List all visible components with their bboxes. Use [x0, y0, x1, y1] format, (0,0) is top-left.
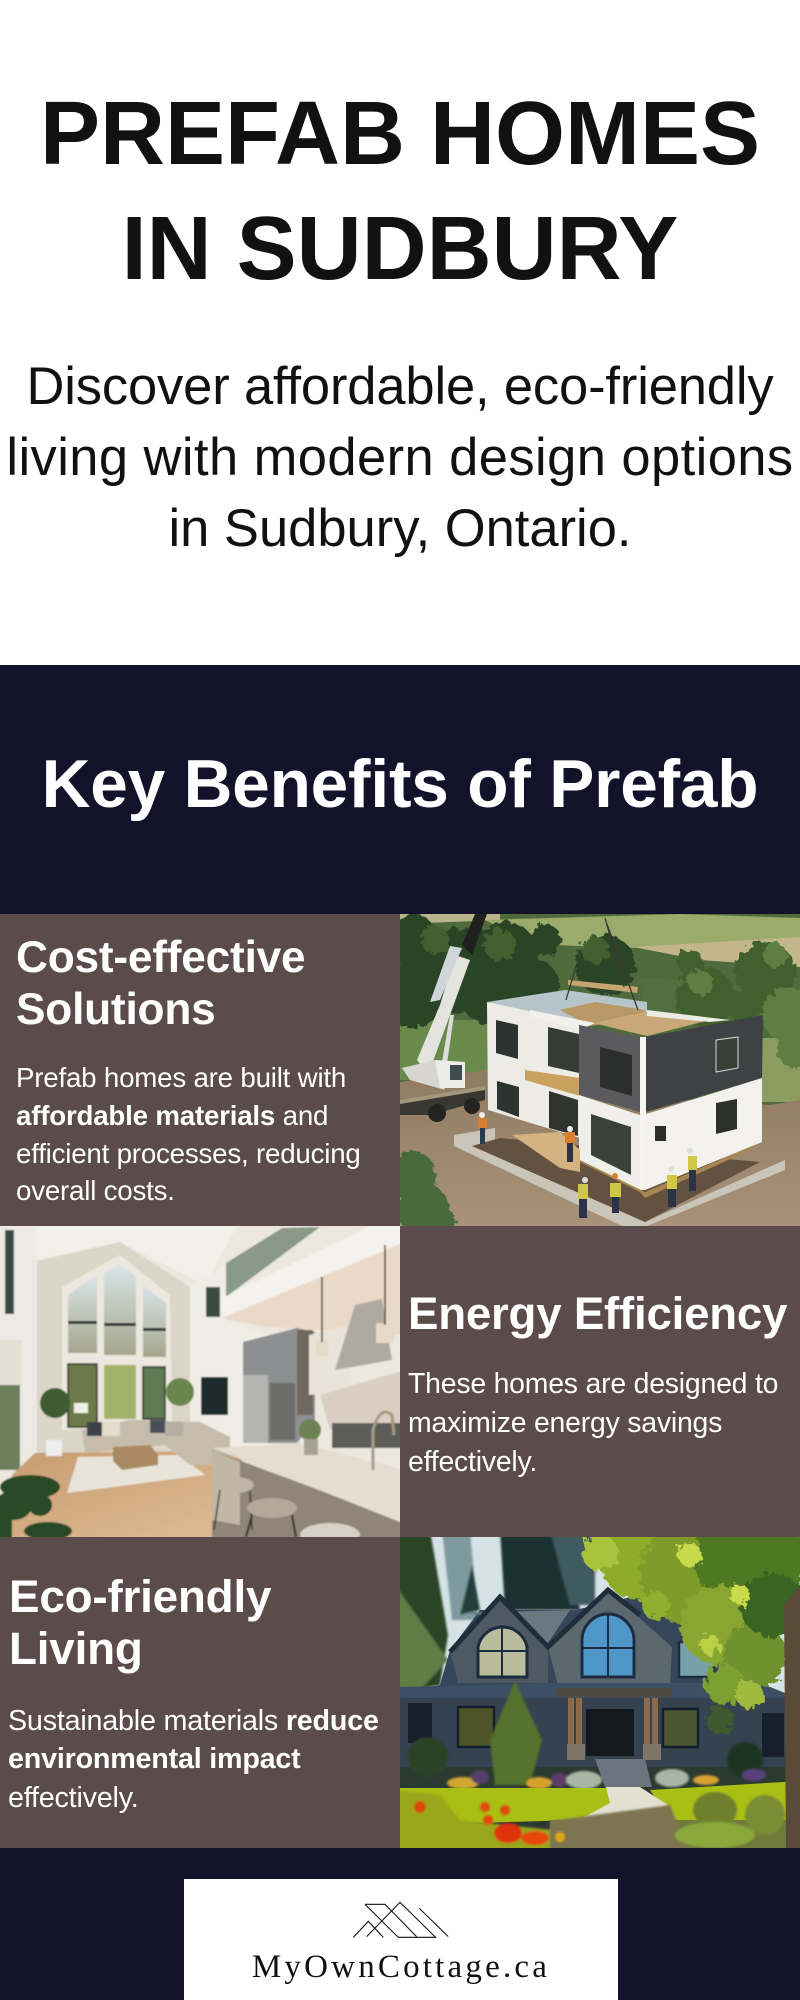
text: eco-friendly body: Sustainable materials reduce: [8, 1705, 379, 1737]
steps: [595, 1759, 652, 1787]
plants: [40, 1378, 194, 1418]
photo: dark house with garden: [400, 1537, 800, 1848]
tree trunk: [784, 1585, 800, 1848]
conifers: [395, 1530, 595, 1693]
rug: [67, 1455, 205, 1493]
porch roof: [400, 1683, 785, 1698]
workers: [478, 1112, 697, 1218]
right wall: [190, 1265, 270, 1450]
lower windows: [458, 1707, 494, 1747]
back wall: [37, 1242, 190, 1453]
photo: bright open-plan interior: [0, 1226, 400, 1537]
lawn: [400, 1788, 612, 1825]
upper loft: [226, 1227, 320, 1297]
foundation walls: [454, 1128, 785, 1226]
text: eco-friendly body: effectively.: [8, 1782, 138, 1814]
text: cost-effective body: overall costs.: [16, 1175, 175, 1206]
kitchen island: [212, 1450, 405, 1545]
kitchen: [243, 1328, 315, 1443]
foreground plants: [550, 1820, 800, 1850]
foreground plant: [0, 1475, 72, 1545]
icon: roof lines logo: [353, 1902, 449, 1938]
heading: cost-effective: [16, 933, 305, 1034]
hoisting beam and cables: [568, 980, 638, 993]
foliage canopy: [582, 1505, 800, 1734]
panel: cost-effective solutions: [0, 914, 400, 1226]
section heading: Key Benefits of Prefab: [42, 747, 758, 822]
navy section background: [0, 665, 800, 2000]
heading: cost-effective: Solutions: [16, 985, 215, 1034]
gable windows: [68, 1275, 97, 1353]
logo box: [184, 1879, 618, 2000]
text: cost-effective body: Prefab homes are built with: [16, 1062, 346, 1093]
arched windows: [478, 1627, 527, 1677]
stools: [216, 1477, 254, 1493]
subtitle: in Sudbury, Ontario.: [168, 499, 632, 558]
sofa: [82, 1420, 230, 1465]
subtitle: [6, 357, 794, 558]
panel: energy efficiency: [400, 1226, 800, 1537]
title: [40, 84, 760, 299]
heading: eco-friendly: Eco-friendly: [9, 1571, 271, 1622]
text: cost-effective body: affordable materials and: [16, 1100, 328, 1131]
heading: energy efficiency: Energy Efficiency: [408, 1288, 787, 1339]
text: energy efficiency body: These homes are designed to: [408, 1368, 778, 1400]
text: eco-friendly body: environmental impact: [8, 1743, 301, 1775]
text: cost-effective body: efficient processes, reducing: [16, 1138, 361, 1169]
text: energy efficiency body: effectively.: [408, 1446, 537, 1478]
panel: eco-friendly living: [0, 1537, 400, 1848]
ceiling: [30, 1220, 240, 1285]
coffee table: [113, 1445, 158, 1470]
logo wordmark: MyOwnCottage.ca: [252, 1949, 550, 1985]
small conifer: [490, 1681, 542, 1785]
header section: [0, 0, 800, 665]
TV: [201, 1377, 228, 1415]
counter plant: [299, 1419, 321, 1441]
faucet: [373, 1412, 394, 1470]
roof: [402, 1595, 760, 1693]
gables: [450, 1597, 548, 1683]
shrubs: [408, 1737, 766, 1789]
text: energy efficiency body: [408, 1368, 778, 1478]
heading: cost-effective: Cost-effective: [16, 933, 305, 982]
foreground shrub: [388, 1151, 456, 1236]
text: energy efficiency body: maximize energy savings: [408, 1407, 722, 1439]
title: PREFAB HOMES: [40, 84, 760, 184]
text: cost-effective body: [16, 1062, 361, 1206]
path: [570, 1787, 668, 1825]
floor: [0, 1450, 260, 1545]
left wall: [0, 1220, 36, 1460]
subtitle: living with modern design options: [6, 428, 794, 487]
photo: crane placing modular house: [400, 914, 800, 1226]
house: [487, 990, 647, 1025]
title: IN SUDBURY: [122, 199, 678, 299]
subtitle: Discover affordable, eco-friendly: [27, 357, 773, 416]
house body: [400, 1695, 785, 1767]
heading: eco-friendly: Living: [9, 1623, 143, 1674]
heading: eco-friendly: [9, 1571, 272, 1674]
crane: [462, 914, 487, 955]
door and columns: [586, 1709, 634, 1756]
text: eco-friendly body: [8, 1705, 379, 1814]
